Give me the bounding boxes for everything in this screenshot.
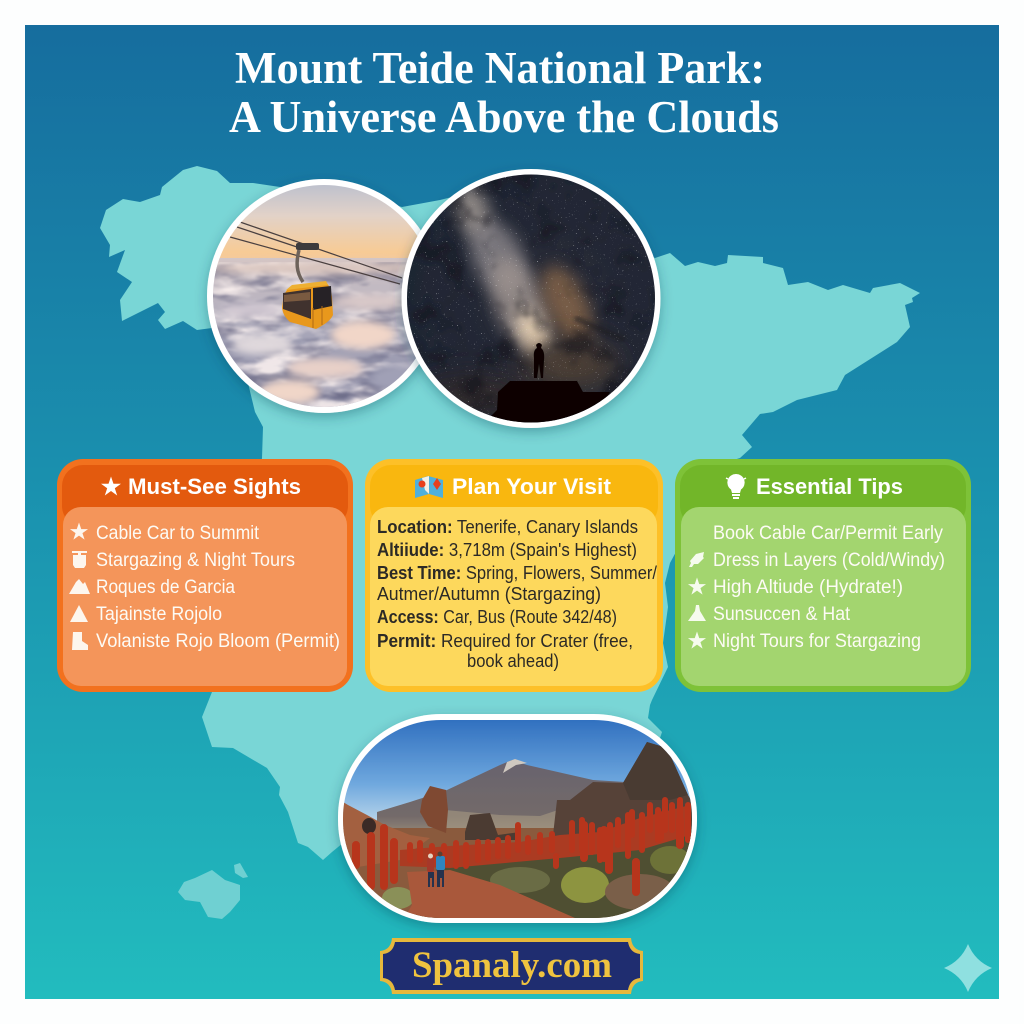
photo: cable car above the clouds (205, 175, 445, 418)
list: tips: High Altiude (Hydrate!) (713, 577, 903, 598)
text: visit details: Best Time: Spring, Flowers, Summer/ (377, 563, 657, 583)
text: visit details: Location: Tenerife, Canary Islands (377, 517, 638, 537)
list: tips: Sunsuccen & Hat (713, 604, 851, 625)
text: visit details (377, 517, 657, 671)
list: tips: Night Tours for Stargazing (713, 631, 921, 652)
list: sights: Tajainste Rojolo (96, 604, 222, 625)
text: visit details: Autmer/Autumn (Stargazing) (377, 584, 601, 604)
panel: must-see sights (57, 459, 353, 692)
title: Mount Teide National Park: (235, 43, 765, 93)
red flower spikes (400, 805, 690, 868)
dirt path (407, 870, 575, 918)
website badge (380, 938, 643, 994)
panel: plan your visit (365, 459, 663, 692)
list: sights (69, 522, 340, 652)
text: visit details: Altiiude: 3,718m (Spain's Highest) (377, 540, 637, 560)
text: visit details: Permit: Required for Crater (free, (377, 631, 633, 651)
title (229, 43, 779, 142)
list: tips: Dress in Layers (Cold/Windy) (713, 550, 945, 571)
hikers (427, 852, 445, 887)
icon: map with pins (415, 476, 443, 498)
rock and person silhouette (491, 343, 610, 422)
cable car (282, 243, 333, 329)
text: visit details: book ahead) (467, 651, 559, 671)
icon: light bulb (726, 474, 746, 499)
heading: must-see sights: Must-See Sights (128, 474, 301, 499)
icon: sparkle (944, 944, 992, 992)
heading: essential tips: Essential Tips (756, 474, 903, 499)
text: visit details: Access: Car, Bus (Route 342/48) (377, 607, 617, 627)
list: sights: Cable Car to Summit (96, 523, 260, 544)
title: A Universe Above the Clouds (229, 92, 779, 142)
photo: Teide volcano with red tajinaste flowers (338, 714, 697, 928)
list: tips (688, 523, 945, 652)
map of Spain (100, 166, 920, 919)
list: sights: Volaniste Rojo Bloom (Permit) (96, 631, 340, 652)
list: sights: Roques de Garcia (96, 577, 235, 598)
heading: plan your visit: Plan Your Visit (452, 474, 612, 499)
photo: Milky Way and stargazer (400, 169, 662, 432)
website badge: Spanaly.com (412, 945, 612, 986)
list: sights: Stargazing & Night Tours (96, 550, 295, 571)
panel: essential tips (675, 459, 971, 692)
cables (230, 222, 402, 284)
list: tips: Book Cable Car/Permit Early (713, 523, 943, 544)
shrubs (416, 830, 692, 918)
